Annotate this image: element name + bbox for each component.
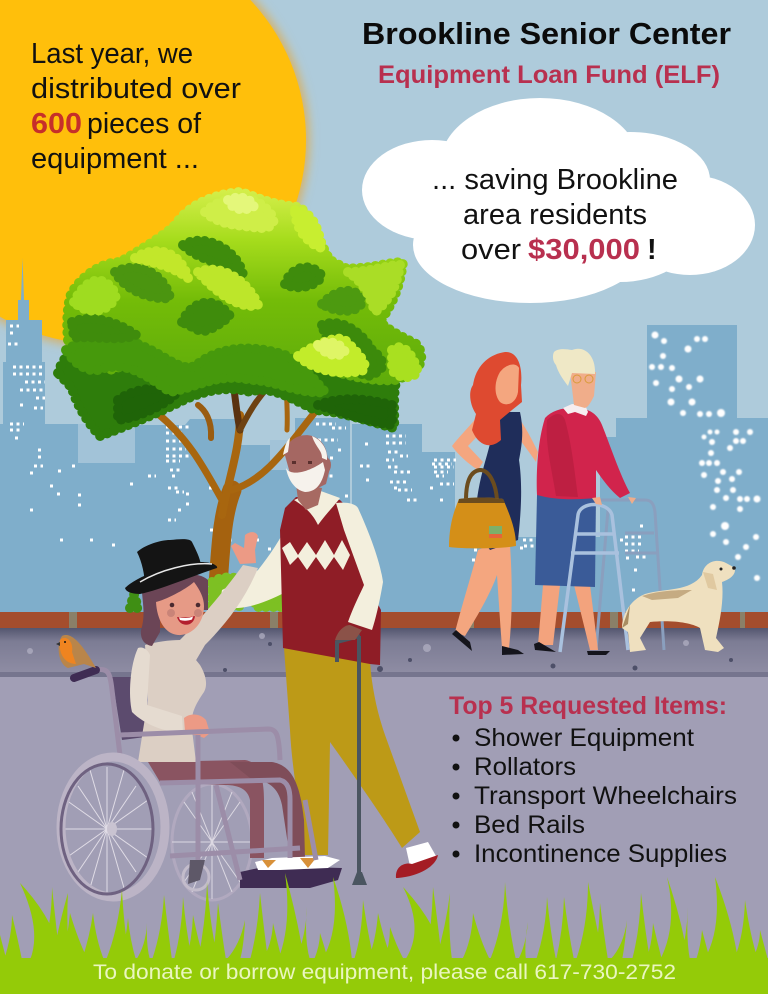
hand on armrest xyxy=(184,714,210,738)
building windows xyxy=(8,326,648,602)
chair frame xyxy=(96,670,316,880)
cloud savings text: ... saving Brookline xyxy=(432,164,678,196)
shoes xyxy=(255,856,340,870)
sweater xyxy=(537,408,630,499)
beard and hair xyxy=(283,436,327,492)
sun statistic text xyxy=(31,38,241,175)
cloud savings text: ! xyxy=(647,234,657,266)
top 5 requested items list xyxy=(449,692,737,868)
shoes xyxy=(534,642,610,655)
legs xyxy=(455,545,512,648)
neck xyxy=(296,484,322,510)
cloud xyxy=(362,98,755,303)
collar xyxy=(563,404,588,416)
sun statistic text: Last year, we xyxy=(31,38,193,70)
cloud savings text: over xyxy=(461,234,521,266)
raised hand xyxy=(231,532,258,564)
front walker frame xyxy=(560,504,628,652)
robin bird xyxy=(56,635,96,668)
lower arm xyxy=(130,647,183,733)
older man with cane xyxy=(221,435,438,885)
footrest xyxy=(240,866,342,888)
dress xyxy=(476,412,522,550)
sun statistic text: pieces of xyxy=(87,108,202,140)
grass xyxy=(0,873,768,994)
arms xyxy=(452,412,538,470)
city skyline xyxy=(0,258,768,613)
top 5 requested items list: Incontinence Supplies xyxy=(474,840,727,868)
bright leaf highlights xyxy=(205,198,273,228)
hands xyxy=(592,497,636,505)
top 5 requested items list: Rollators xyxy=(474,753,576,781)
top 5 requested items list: Bed Rails xyxy=(474,811,585,839)
hair xyxy=(470,352,522,445)
footer call to action: To donate or borrow equipment, please call 617-730-2752 xyxy=(93,961,676,984)
rear walker frame xyxy=(593,500,664,650)
head xyxy=(284,435,330,492)
torso xyxy=(138,640,206,762)
sun statistic text: equipment ... xyxy=(31,143,199,175)
older woman with walker xyxy=(534,349,664,655)
handbag xyxy=(449,470,516,548)
skirt xyxy=(535,495,596,587)
tree xyxy=(58,192,421,585)
top 5 requested items list: Top 5 Requested Items: xyxy=(449,692,727,720)
raised arm xyxy=(178,565,258,662)
face xyxy=(570,372,596,408)
sidewalk xyxy=(0,628,768,677)
cloud savings text xyxy=(432,164,678,266)
ear xyxy=(323,458,331,472)
facial features xyxy=(167,603,202,625)
sweater vest xyxy=(280,497,381,665)
tree trunk and branches xyxy=(157,378,315,585)
black hat xyxy=(125,539,217,594)
road xyxy=(0,677,768,994)
hair xyxy=(141,574,208,646)
brick wall xyxy=(0,612,768,629)
cane xyxy=(357,636,361,880)
shrub behind figures xyxy=(130,577,284,608)
seat back xyxy=(112,677,160,740)
sun statistic text: distributed over xyxy=(31,73,241,105)
large wheel xyxy=(61,757,165,897)
sun statistic text: 600 xyxy=(31,108,82,140)
shoes xyxy=(452,630,524,655)
dark leaf clumps xyxy=(72,319,136,338)
sun xyxy=(0,0,309,347)
hand on cane xyxy=(335,625,362,640)
trousers xyxy=(284,648,420,855)
woman in wheelchair xyxy=(61,532,342,900)
hair xyxy=(553,349,595,386)
rear wheel xyxy=(172,784,252,900)
face xyxy=(496,365,519,404)
sleeve xyxy=(336,503,383,630)
glasses xyxy=(573,375,593,383)
face xyxy=(156,582,204,635)
title: Brookline Senior Center xyxy=(362,16,731,51)
tree canopy xyxy=(58,192,421,436)
walking woman with red hair xyxy=(449,352,538,655)
front caster xyxy=(183,860,209,890)
cloud savings text: area residents xyxy=(463,199,647,231)
glowing tower windows xyxy=(649,332,760,581)
top 5 requested items list: Transport Wheelchairs xyxy=(474,782,737,810)
chair grip xyxy=(74,670,96,678)
subtitle: Equipment Loan Fund (ELF) xyxy=(378,61,720,89)
cloud savings text: $30,000 xyxy=(528,234,640,266)
dog xyxy=(622,561,736,652)
legs xyxy=(538,585,598,650)
foot and slipper xyxy=(406,842,436,866)
eyes xyxy=(292,461,312,464)
top 5 requested items list: Shower Equipment xyxy=(474,724,694,752)
raised arm xyxy=(221,520,290,608)
legs xyxy=(148,760,264,858)
